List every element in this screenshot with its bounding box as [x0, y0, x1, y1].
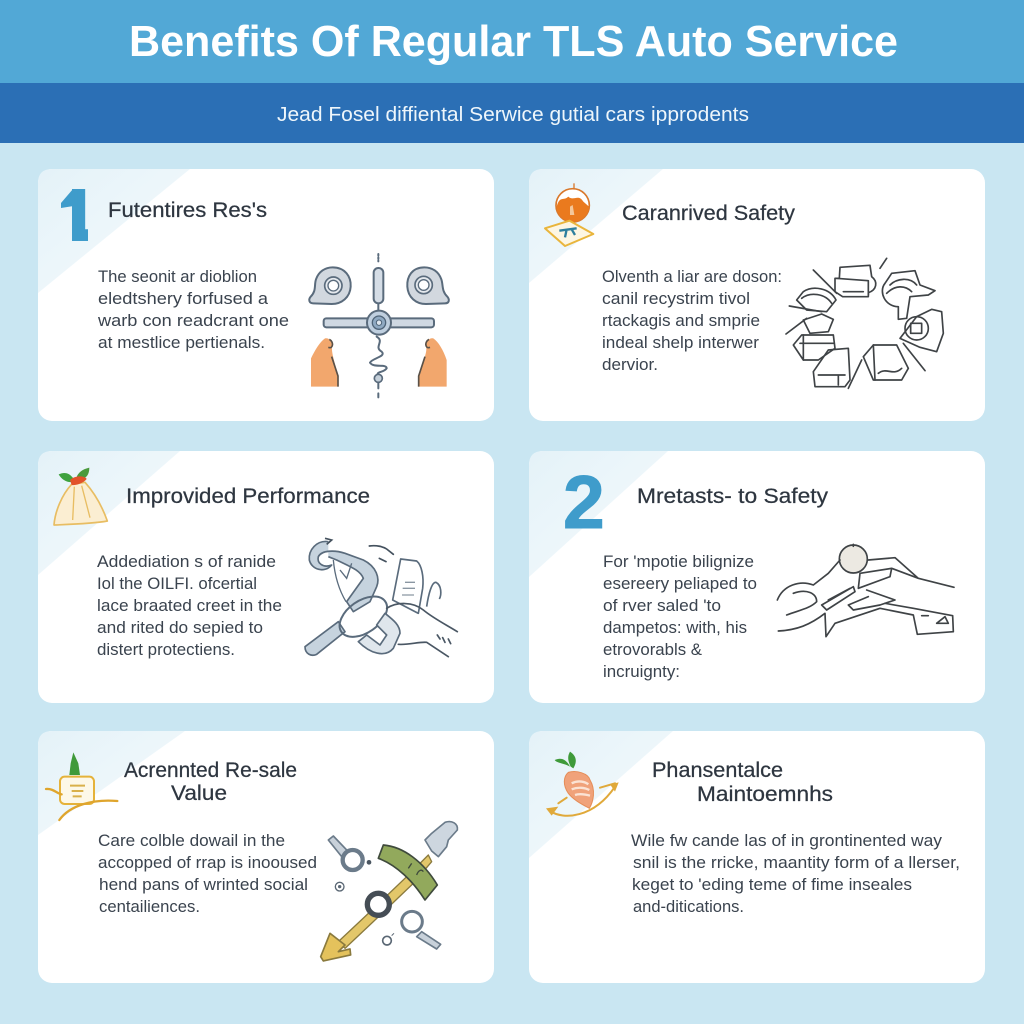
heading: card 5 [124, 759, 297, 805]
body text: card 2: canil recystrim tivol [602, 289, 750, 308]
body text: card 5: centailiences. [99, 897, 200, 916]
heading: card 1: Futentires Res's [108, 199, 267, 222]
body text: card 6 [631, 831, 960, 916]
body text: card 6: and-ditications. [633, 897, 744, 916]
body text: card 3: Addediation s of ranide [97, 552, 276, 571]
body text: card 5: accopped of rrap is inooused [98, 853, 317, 872]
number 1 [61, 189, 88, 241]
body text: card 2: rtackagis and smprie [602, 311, 760, 330]
body text: card 2: dervior. [602, 355, 658, 374]
body text: card 4 [603, 552, 757, 681]
number 1: 1 [53, 173, 95, 258]
number 2: 2 [563, 460, 605, 544]
header: title band [0, 0, 1024, 83]
body text: card 6: snil is the rricke, maantity form of a llerser, [633, 853, 960, 872]
illustration: hands with tool [777, 544, 954, 637]
heading: card 5: Value [171, 782, 227, 805]
body text: card 3: Iol the OILFI. ofcertial [97, 574, 257, 593]
body text: card 2 [602, 267, 782, 374]
subtitle: Jead Fosel diffiental Serwice gutial cars ipprodents [277, 104, 749, 126]
illustration: gear mechanism and hands [309, 254, 449, 397]
body text: card 4: esereery peliaped to [603, 574, 757, 593]
body text: card 2: Olventh a liar are doson: [602, 267, 782, 286]
heading: card 6: Maintoemnhs [697, 783, 833, 806]
title: Benefits Of Regular TLS Auto Service [129, 17, 898, 66]
illustration: ring of car parts [786, 258, 943, 388]
body text: card 5: hend pans of wrinted social [99, 875, 308, 894]
body text: card 1 [97, 267, 289, 352]
body text: card 6: Wile fw cande las of in grontinented way [631, 831, 943, 850]
body text: card 2: indeal shelp interwer [602, 333, 759, 352]
icon: carrot with arrows [546, 752, 619, 816]
body text: card 4: dampetos: with, his [603, 618, 747, 637]
body text: card 3: and rited do sepied to [97, 618, 263, 637]
body text: card 4: etrovorabls & [603, 640, 703, 659]
panel: card 5 [38, 731, 494, 983]
panel: card 6 [529, 731, 985, 983]
panel: card 3 [38, 451, 494, 703]
body text: card 1: at mestlice pertienals. [98, 333, 265, 352]
body text: card 3 [97, 552, 282, 659]
body text: card 4: of rver saled 'to [603, 596, 721, 615]
illustration: wrench and hand [305, 538, 457, 657]
body text: card 4: For 'mpotie bilignize [603, 552, 754, 571]
body text: card 5: Care colble dowail in the [98, 831, 285, 850]
body text: card 6: keget to 'eding teme of fime inseales [632, 875, 912, 894]
icon: tree on box [46, 752, 117, 820]
body text: card 1: eledtshery forfused a [98, 289, 269, 308]
panel: card 2 [529, 169, 985, 421]
heading: card 6: Phansentalce [652, 759, 783, 782]
panel: card 4 [529, 451, 985, 703]
body text: card 1: warb con readcrant one [97, 311, 289, 330]
body text: card 3: distert protectiens. [97, 640, 235, 659]
heading: card 3: Improvided Performance [126, 485, 370, 508]
body text: card 4: incruignty: [603, 662, 680, 681]
heading: card 5: Acrennted Re-sale [124, 759, 297, 782]
body text: card 1: The seonit ar dioblion [98, 267, 257, 286]
heading: card 2: Caranrived Safety [622, 202, 796, 225]
panel: card 1 [38, 169, 494, 421]
body text: card 3: lace braated creet in the [97, 596, 282, 615]
body text: card 5 [98, 831, 317, 916]
icon: orange globe on map [545, 183, 593, 246]
heading: card 6 [652, 759, 833, 806]
heading: card 4: Mretasts- to Safety [637, 485, 829, 508]
illustration: arrow, shovel and wrenches [321, 822, 457, 961]
icon: bag with leaves [54, 468, 107, 525]
header: subtitle band [0, 83, 1024, 143]
